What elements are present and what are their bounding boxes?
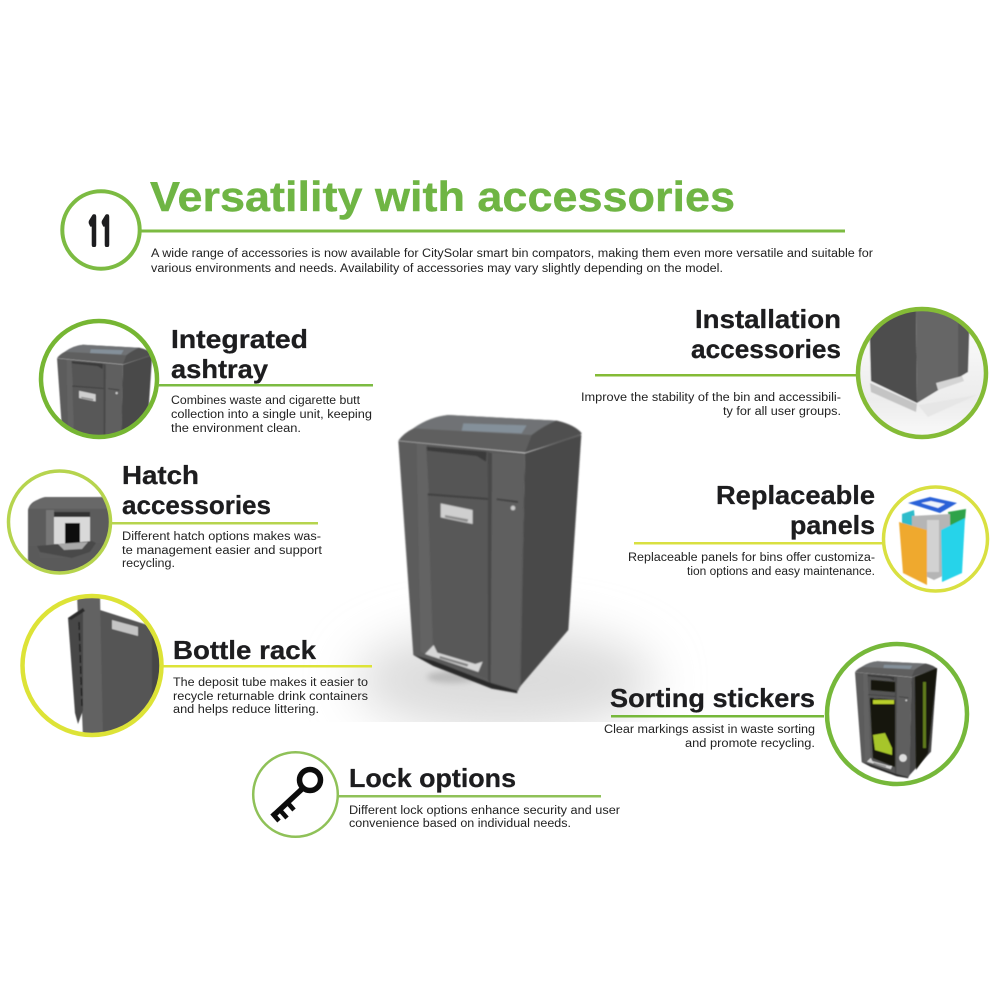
- rule: [158, 384, 373, 386]
- description: collection into a single unit, keeping: [171, 409, 372, 421]
- panel: bottle rack: [22, 594, 372, 737]
- heading: Installation: [695, 304, 841, 334]
- description: Combines waste and cigarette butt: [171, 395, 361, 407]
- title rule: [141, 230, 845, 232]
- description: [628, 552, 875, 578]
- rule: [595, 374, 856, 376]
- intro text: A wide range of accessories is now available for CitySolar smart bin compators, making them even more versatile and suitable for: [151, 248, 873, 260]
- panel: replaceable panels: [628, 480, 988, 591]
- heading: accessories: [122, 490, 271, 520]
- description: te management easier and support: [122, 545, 323, 557]
- description: ty for all user groups.: [723, 406, 841, 418]
- main product image: ground shadow: [355, 628, 655, 732]
- panel: hatch accessories: [8, 460, 323, 576]
- panel: integrated ashtray: [38, 318, 373, 440]
- description: and helps reduce littering.: [173, 704, 319, 716]
- panel: installation accessories: [581, 304, 990, 440]
- description: [173, 677, 368, 716]
- heading: Lock options: [349, 763, 516, 793]
- icon: hatch photo: [8, 471, 110, 576]
- description: and promote recycling.: [685, 738, 815, 750]
- description: [122, 531, 323, 570]
- title: Versatility with accessories: [150, 173, 735, 220]
- heading: panels: [790, 510, 875, 540]
- heading: Integrated: [171, 324, 308, 354]
- main product image: smart bin: [398, 415, 582, 693]
- icon: ashtray photo: [38, 318, 160, 440]
- description: Clear markings assist in waste sorting: [604, 724, 815, 736]
- rule: [163, 665, 372, 668]
- description: [349, 805, 620, 830]
- intro text: [151, 248, 873, 275]
- icon: installation photo: [855, 305, 990, 440]
- description: recycle returnable drink containers: [173, 691, 368, 703]
- heading: Sorting stickers: [610, 683, 815, 713]
- icon: key: [253, 752, 338, 837]
- rule: [338, 795, 601, 798]
- badge: number 11: [62, 191, 140, 269]
- heading: Hatch: [122, 460, 199, 490]
- description: [604, 724, 815, 750]
- heading: [691, 304, 841, 364]
- description: Replaceable panels for bins offer customiza-: [628, 552, 875, 564]
- description: Different hatch options makes was-: [122, 531, 321, 543]
- icon: bin with stickers: [827, 644, 967, 784]
- rule: [634, 542, 883, 544]
- heading: [171, 324, 308, 384]
- rule: [611, 715, 824, 718]
- heading: Replaceable: [716, 480, 875, 510]
- heading: ashtray: [171, 354, 269, 384]
- icon: exploded panels: [884, 487, 988, 591]
- description: [581, 392, 841, 418]
- badge: number 11: 11: [87, 213, 113, 251]
- rule: [112, 522, 318, 524]
- description: recycling.: [122, 558, 175, 570]
- description: Improve the stability of the bin and accessibili-: [581, 392, 841, 404]
- heading: accessories: [691, 334, 841, 364]
- heading: [122, 460, 271, 520]
- description: [171, 395, 372, 435]
- panel: lock options: [253, 752, 620, 837]
- panel: sorting stickers: [604, 644, 967, 784]
- description: The deposit tube makes it easier to: [173, 677, 368, 689]
- description: convenience based on individual needs.: [349, 818, 571, 830]
- heading: Bottle rack: [173, 635, 317, 665]
- icon: bottle rack photo: [22, 594, 162, 737]
- description: the environment clean.: [171, 423, 301, 435]
- heading: [716, 480, 875, 540]
- intro text: various environments and needs. Availability of accessories may vary slightly depending on the model.: [151, 263, 723, 275]
- description: tion options and easy maintenance.: [687, 566, 875, 578]
- description: Different lock options enhance security and user: [349, 805, 620, 817]
